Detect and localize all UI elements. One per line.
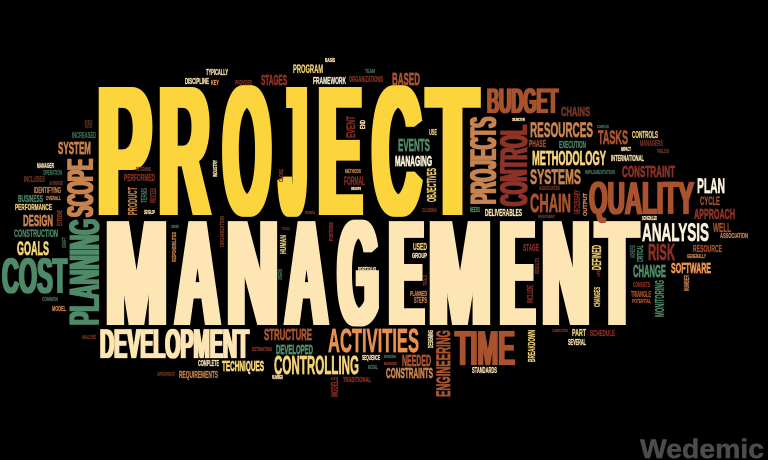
left word cluster: DESIGN <box>23 213 53 230</box>
words inside the letters of MANAGEMENT: DEFINED <box>589 245 604 270</box>
right upper word cluster: FIELDS <box>657 149 669 155</box>
right lower word cluster: CRITICAL <box>635 245 645 262</box>
words inside the letters of PROJECT: WORKS <box>305 210 315 215</box>
word: ACTIVITIES: ACTIVITIES <box>328 322 419 359</box>
left word cluster: MODEL <box>52 304 66 313</box>
right lower word cluster: SOFTWARE <box>671 261 711 277</box>
bottom word cluster: STRUCTURE <box>264 327 312 344</box>
left word cluster: PERFORMANCE <box>15 202 52 212</box>
right upper word cluster: CHAINS <box>561 104 590 119</box>
words inside the letters of MANAGEMENT <box>171 216 604 307</box>
bottom word cluster: TRADITIONAL <box>343 375 371 384</box>
words inside the letters of MANAGEMENT: STAGE <box>523 243 539 254</box>
words inside the letters of PROJECT: DETERMINE <box>136 167 151 173</box>
right upper word cluster: INTERNATIONAL <box>611 153 644 163</box>
words inside the letters of PROJECT: OBJECTIVES <box>424 168 439 202</box>
title word: PROJECT: E <box>318 48 362 255</box>
top word cluster: STAGES <box>261 73 287 89</box>
right upper word cluster: ASSOCIATION <box>720 231 748 240</box>
left word cluster: IDENTIFYING <box>34 185 61 195</box>
right upper word cluster: SCHEDULED <box>642 216 657 222</box>
words inside the letters of PROJECT <box>124 116 439 216</box>
top word cluster: TYPICALLY <box>206 67 228 77</box>
words inside the letters of PROJECT: MANAGING <box>395 154 432 170</box>
right upper word cluster: NECESSARY <box>572 190 582 214</box>
words inside the letters of MANAGEMENT: ORGANIZATION <box>220 216 226 247</box>
words inside the letters of MANAGEMENT: STEPS <box>414 295 427 305</box>
left word cluster: INCLUDES <box>24 174 45 184</box>
title word: PROJECT: C <box>373 48 421 255</box>
right lower word cluster: RISK <box>648 239 675 265</box>
right upper word cluster: CONTROL <box>493 125 536 206</box>
words inside the letters of PROJECT: FORMAL <box>344 175 365 188</box>
words inside the letters of PROJECT: END <box>358 120 367 129</box>
top word cluster <box>185 58 420 89</box>
bottom word cluster: CONTROLLING <box>274 350 359 380</box>
left word cluster: SCOPE <box>60 159 101 217</box>
top word cluster: PROVIDES <box>235 78 252 87</box>
right upper word cluster: COMPLEX <box>597 124 609 129</box>
left word cluster: CRAFT <box>62 237 68 248</box>
bottom word cluster: DEVELOPED <box>276 342 313 357</box>
right lower word cluster: CONSISTS <box>633 280 650 289</box>
words inside the letters of PROJECT: CLOSE <box>279 169 285 182</box>
top word cluster: TEAM <box>365 69 375 75</box>
word: TIME: TIME <box>455 322 515 376</box>
bottom word cluster: MANAGED <box>384 361 397 366</box>
left word cluster: EXTREME <box>55 210 64 226</box>
title word: PROJECT <box>97 48 478 255</box>
top word cluster: ORGANIZATIONS <box>349 74 383 84</box>
right upper word cluster: CYCLE <box>700 195 720 208</box>
left word cluster: ACHIEVED <box>49 181 63 187</box>
words inside the letters of PROJECT: DEVELOP <box>144 210 155 216</box>
right upper word cluster: NEEDS <box>470 205 480 214</box>
bottom word cluster: WORKING <box>384 354 396 359</box>
right lower word cluster: ACHIEVE <box>628 245 637 258</box>
right upper word cluster: IMPACT <box>621 147 631 153</box>
right lower word cluster: COMPLETION <box>552 328 568 333</box>
bottom word cluster: TECHNIQUES <box>222 359 264 375</box>
right lower word cluster: POTENTIAL <box>632 299 651 305</box>
right upper word cluster: SYSTEMS <box>530 164 581 189</box>
top word cluster: DISCIPLINE <box>185 76 209 86</box>
left word cluster <box>2 120 109 341</box>
text: T <box>597 188 637 357</box>
right upper word cluster: ASSOCIATED <box>539 186 560 192</box>
left word cluster: ANALYSIS <box>82 335 96 341</box>
top word cluster: BASIS <box>325 58 335 64</box>
word: ANALYSIS: ANALYSIS <box>642 220 709 247</box>
bottom word cluster: APPROPRIATE <box>157 372 175 378</box>
right upper word cluster: EXECUTION <box>559 140 586 151</box>
bottom word cluster: NEEDED <box>402 353 431 370</box>
title word: PROJECT: O <box>224 48 270 255</box>
words inside the letters of PROJECT: METHODS <box>345 169 361 175</box>
right upper word cluster: RESOURCES <box>530 117 593 142</box>
right lower word cluster: MONITORING <box>652 280 667 317</box>
right upper word cluster: PHASE <box>529 139 546 150</box>
right upper word cluster: INVESTMENT <box>538 214 555 219</box>
left word cluster: COMMON <box>42 297 58 303</box>
words inside the letters of PROJECT: PRODUCT <box>125 187 140 215</box>
right upper word cluster: OBJECTIVE <box>512 117 525 122</box>
words inside the letters of PROJECT: CLOSING <box>422 208 437 214</box>
bottom word cluster: CONSTRAINTS <box>386 366 433 382</box>
bottom word cluster: DESIGNING <box>426 330 435 348</box>
words inside the letters of PROJECT: TERMS <box>139 188 149 203</box>
bottom word cluster: ESTIMATING <box>252 347 272 353</box>
words inside the letters of MANAGEMENT: TOOLS <box>423 275 429 286</box>
right lower word cluster: RESOURCE <box>693 244 722 255</box>
title word: MANAGEMENT: M <box>429 188 491 357</box>
words inside the letters of MANAGEMENT: RESPONSIBILITIES <box>172 232 178 262</box>
left word cluster: PLANNING <box>61 219 109 325</box>
left word cluster: MANAGER <box>37 161 54 170</box>
right lower word cluster: CHANGE <box>633 261 666 281</box>
bottom word cluster: REQUIREMENTS <box>179 370 218 381</box>
title word: MANAGEMENT: A <box>176 188 219 357</box>
right upper word cluster: PROJECTS <box>463 117 504 204</box>
left word cluster: CONSTRUCTION <box>14 228 58 240</box>
right upper word cluster: METHODOLOGY <box>532 148 606 170</box>
title word: MANAGEMENT: N <box>227 188 278 357</box>
title word: MANAGEMENT: M <box>106 188 167 357</box>
right lower word cluster: TRIANGLE <box>631 289 651 299</box>
title word: PROJECT: R <box>159 48 209 255</box>
right upper word cluster: CHAIN <box>530 188 571 218</box>
right lower word cluster: NUMBER <box>682 275 691 291</box>
left word cluster: SYSTEM <box>58 138 91 158</box>
words inside the letters of MANAGEMENT: USED <box>413 242 427 253</box>
bottom word cluster: NUMBER <box>272 375 283 381</box>
right upper word cluster <box>463 82 748 240</box>
words inside the letters of PROJECT: EVENT <box>345 116 358 138</box>
left word cluster: BUSINESS <box>18 194 43 205</box>
words inside the letters of PROJECT: INDUSTRY <box>213 160 219 177</box>
right upper word cluster: CONSTRAINT <box>622 164 675 181</box>
title word: MANAGEMENT: E <box>390 188 423 357</box>
bottom word cluster: STANDARDS <box>472 365 497 375</box>
words inside the letters of MANAGEMENT: RESULTS <box>535 258 541 274</box>
title word: PROJECT: J <box>281 48 306 255</box>
words inside the letters of MANAGEMENT: CHANGES <box>592 287 602 307</box>
right lower word cluster <box>527 220 722 362</box>
words inside the letters of MANAGEMENT: LIFE <box>596 270 601 277</box>
bottom word cluster: DEVELOPMENT <box>100 320 249 367</box>
top word cluster: FRAMEWORK <box>313 76 346 87</box>
words inside the letters of MANAGEMENT: USERS <box>278 269 284 280</box>
words inside the letters of MANAGEMENT: TOOLS <box>282 226 290 231</box>
left word cluster: OPERATION <box>43 168 62 177</box>
right upper word cluster: BUDGET <box>487 82 558 121</box>
bottom word cluster: MODEL <box>368 365 378 371</box>
right lower word cluster: GENERALLY <box>687 254 706 260</box>
right lower word cluster: BREAKDOWN <box>527 330 538 362</box>
right lower word cluster: PART <box>572 328 586 339</box>
words inside the letters of PROJECT: PERFORMED <box>124 173 155 184</box>
title word: MANAGEMENT: G <box>338 188 378 357</box>
top word cluster: KEY <box>211 78 219 87</box>
right upper word cluster: TASKS <box>598 128 628 149</box>
right upper word cluster: WELL <box>713 220 731 235</box>
word: ENGINEERING: ENGINEERING <box>434 330 455 397</box>
left word cluster: COST <box>2 248 67 304</box>
words inside the letters of MANAGEMENT: HUMAN <box>278 235 288 254</box>
words inside the letters of PROJECT: USE <box>429 127 437 137</box>
words inside the letters of MANAGEMENT: ORDER <box>171 224 179 229</box>
text: USER <box>84 120 95 128</box>
right upper word cluster: OUTPUT <box>583 193 589 216</box>
right upper word cluster: PLAN <box>697 173 725 198</box>
bottom word cluster: SEQUENCE <box>362 353 380 362</box>
text: T <box>427 48 478 255</box>
words inside the letters of MANAGEMENT: PORTFOLIO <box>358 267 376 273</box>
words inside the letters of MANAGEMENT: GROUP <box>412 251 427 260</box>
top word cluster: PROGRAM <box>293 63 323 76</box>
right upper word cluster: IMPLEMENTATION <box>585 170 615 176</box>
title word: MANAGEMENT <box>106 188 637 357</box>
bottom word cluster <box>100 320 515 397</box>
words inside the letters of PROJECT: EVENTS <box>398 135 430 155</box>
left word cluster: INCREASED <box>72 130 96 140</box>
left word cluster: OVERALL <box>46 196 61 202</box>
title word: MANAGEMENT: N <box>542 188 590 357</box>
title word: PROJECT: P <box>97 48 151 255</box>
title word: MANAGEMENT: E <box>500 188 534 357</box>
words inside the letters of MANAGEMENT: POSITIONS <box>329 222 335 241</box>
right upper word cluster: MANAGERS <box>640 138 663 148</box>
right lower word cluster: SEVERAL <box>568 337 586 347</box>
right upper word cluster: DELIVERABLES <box>485 208 522 219</box>
left word cluster: GOALS <box>17 239 49 260</box>
right upper word cluster: CONTROLS <box>632 130 658 141</box>
bottom word cluster: COMPLETE <box>198 358 219 368</box>
words inside the letters of MANAGEMENT: PLANNED <box>410 289 427 298</box>
title word: MANAGEMENT: A <box>286 188 327 357</box>
bottom word cluster: MODELS <box>330 377 341 397</box>
words inside the letters of MANAGEMENT: INCLUDE <box>525 285 535 303</box>
right lower word cluster: SCHEDULE <box>590 328 615 338</box>
words inside the letters of PROJECT: PROCESS <box>148 188 158 203</box>
words inside the letters of PROJECT: GROUPS <box>351 186 361 191</box>
text: BASED <box>392 69 420 89</box>
